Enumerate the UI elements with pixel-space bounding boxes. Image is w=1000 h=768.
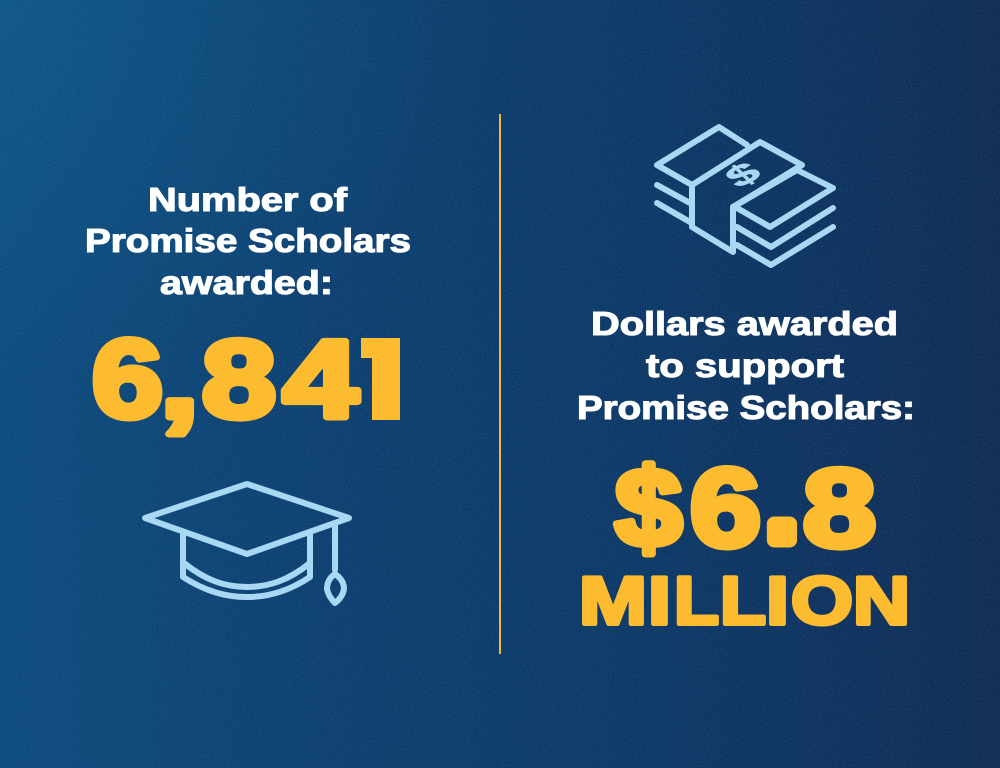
stat: $6.8 million: 8 (803, 447, 876, 570)
stat: $6.8 million: L (720, 563, 766, 639)
icon: graduation cap (145, 484, 349, 603)
stat: 6,841: 1 (355, 318, 415, 441)
stat: $6.8 million: I (766, 563, 789, 639)
heading: dollars awarded: Dollars awarded (591, 305, 898, 342)
heading: dollars awarded: to support (646, 347, 844, 384)
heading: number of promise scholars: awarded: (160, 264, 333, 301)
stat: 6,841: 4 (283, 318, 358, 441)
heading: dollars awarded: Promise Scholars: (577, 389, 915, 426)
stat: $6.8 million: $ (615, 447, 682, 570)
stat: $6.8 million: N (853, 563, 910, 639)
heading: number of promise scholars: Promise Scholars (85, 222, 411, 259)
icon: dollar sign on money: $ (717, 156, 769, 194)
panel: scholars (85, 181, 415, 603)
stat: $6.8 million: M (579, 563, 647, 639)
stat: $6.8 million: I (648, 563, 671, 639)
stat: $6.8 million: L (674, 563, 719, 639)
heading: number of promise scholars: Number of (148, 181, 348, 218)
stat: 6,841: 8 (202, 318, 276, 441)
stat: $6.8 million: O (791, 563, 853, 639)
heading: dollars awarded (577, 305, 915, 426)
stat: 6,841: 6 (92, 318, 163, 441)
stat: 6,841: , (160, 318, 199, 441)
heading: number of promise scholars (85, 181, 411, 301)
stat: $6.8 million: 6 (690, 447, 761, 570)
stat: $6.8 million (579, 442, 910, 639)
stat: $6.8 million: . (767, 442, 797, 563)
divider line (499, 114, 501, 654)
stat: 6,841 (92, 336, 400, 438)
panel: dollars (577, 127, 915, 639)
icon: stack of money (657, 127, 833, 265)
